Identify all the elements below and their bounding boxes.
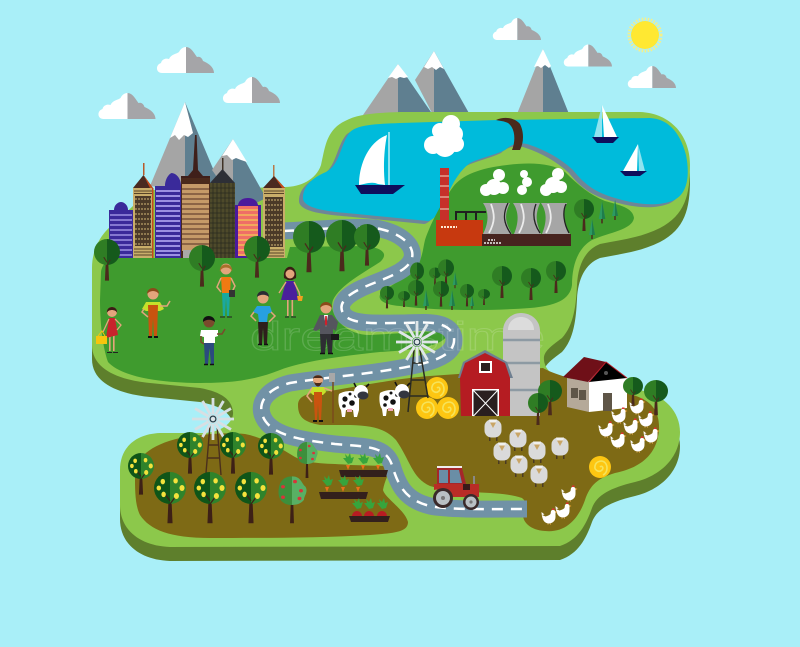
building: tan striped with antenna <box>181 135 210 258</box>
clouds <box>98 18 676 119</box>
background mountains <box>363 49 569 115</box>
trees right of factory <box>574 199 618 239</box>
person: businessman in suit <box>313 302 339 354</box>
watermark text: dreamstime <box>250 315 545 359</box>
cooling towers <box>483 203 570 234</box>
building: dark olive grid <box>210 158 235 258</box>
factory hill <box>380 163 634 310</box>
windmill left <box>192 398 234 475</box>
farm field <box>298 368 659 531</box>
island: top surface <box>92 112 690 547</box>
chickens <box>542 398 660 525</box>
carrot bed top <box>339 453 388 477</box>
park trees <box>94 220 380 287</box>
person: woman in orange top <box>217 264 235 317</box>
waterfall pipe <box>496 118 523 150</box>
hay bales <box>416 377 611 478</box>
orchard field <box>135 433 408 538</box>
lake with grey shore <box>299 118 688 224</box>
sheep flock <box>484 420 568 487</box>
cooling tower smoke <box>480 168 567 196</box>
big white smoke <box>424 115 464 157</box>
sailboat right <box>620 144 647 176</box>
building: pink striped <box>235 198 261 258</box>
winding road <box>261 227 527 509</box>
farmer with pitchfork <box>307 373 335 423</box>
forest trees <box>380 259 566 310</box>
windmill right <box>396 321 438 412</box>
person: woman in red dress <box>96 307 121 352</box>
farmhouse <box>563 357 627 412</box>
silo <box>503 313 540 416</box>
building: purple low <box>109 202 133 258</box>
beet bed bottom <box>349 498 390 522</box>
carrot bed middle <box>319 475 368 499</box>
sun <box>629 19 661 51</box>
person: man in blue shirt <box>251 291 275 344</box>
red barn <box>458 350 513 416</box>
vegetable beds <box>319 453 390 522</box>
cows <box>338 382 410 417</box>
building: tan with spire right <box>263 165 285 258</box>
person: man in white shirt <box>200 316 225 364</box>
chimney <box>440 168 449 220</box>
person: man in overalls <box>142 288 170 338</box>
city mountains <box>150 102 266 215</box>
park green <box>100 246 446 383</box>
island: side wall <box>92 126 690 561</box>
sailboat upper right <box>592 105 619 143</box>
trees near farmhouse <box>528 377 668 425</box>
building: purple tall <box>155 173 181 258</box>
building: tan with spire left <box>133 163 154 258</box>
person: woman in purple dress <box>279 267 303 317</box>
orchard pear trees <box>128 432 284 523</box>
sailboat large <box>355 132 405 194</box>
skyline buildings <box>109 135 285 258</box>
tractor <box>433 466 479 510</box>
apple trees <box>278 442 318 523</box>
factory with chimney <box>436 168 571 246</box>
